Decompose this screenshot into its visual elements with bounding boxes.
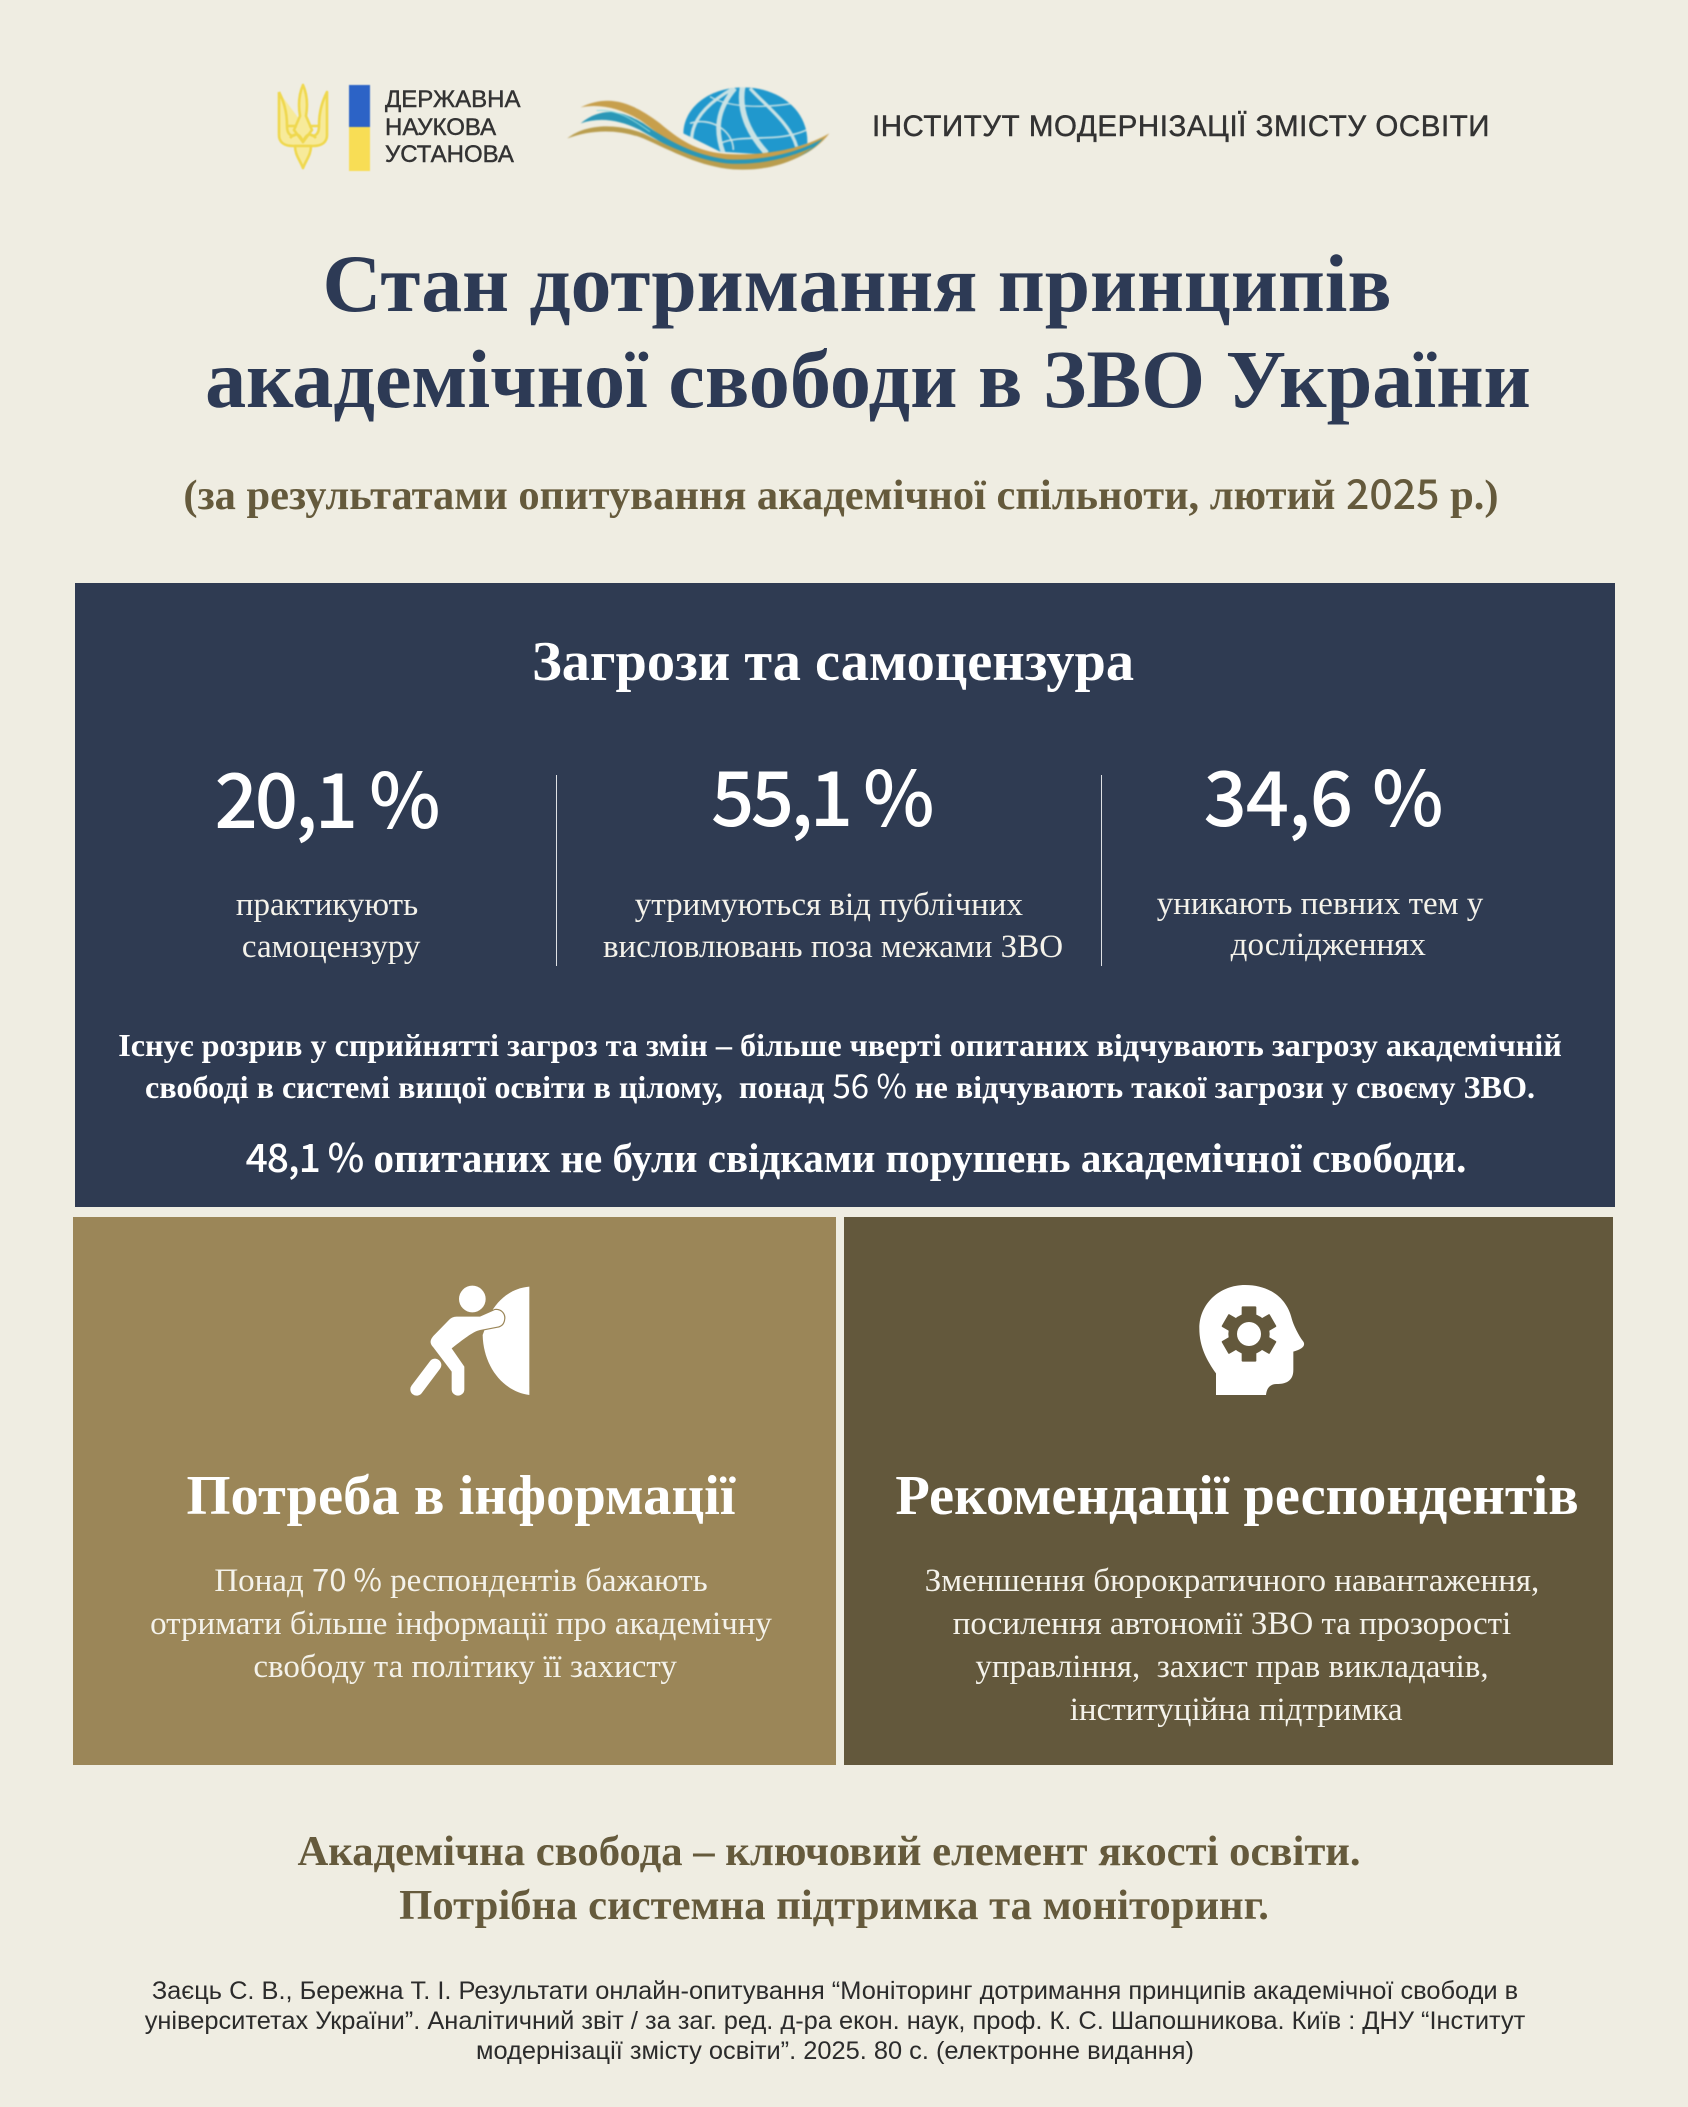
panel text	[925, 1563, 1539, 1728]
stat label	[603, 887, 1063, 964]
title line 1: Стан дотримання принципів	[323, 238, 1391, 329]
divider	[1101, 775, 1102, 966]
panel text: посилення автономії ЗВО та прозорості	[953, 1606, 1511, 1642]
stat label: практикують	[236, 887, 418, 923]
stat label: висловлювань поза межами ЗВО	[603, 928, 1063, 964]
stat 2	[603, 738, 1063, 964]
stat label	[1157, 886, 1484, 963]
conclusion line 2: Потрібна системна підтримка та моніторинг.	[399, 1882, 1269, 1929]
subtitle: (за результатами опитування академічної спільноти, лютий 2025 р.)	[183, 461, 1499, 521]
paragraph: perception gap	[118, 1027, 1562, 1108]
text: logo name: УСТАНОВА	[385, 141, 514, 168]
stat label: самоцензуру	[242, 928, 420, 964]
conclusion line 1: Академічна свобода – ключовий елемент якості освіти.	[297, 1828, 1361, 1875]
paragraph: perception gap: Існує розрив у сприйнятті загроз та змін – більше чверті опитаних відчувають загрозу академічній	[118, 1027, 1562, 1063]
title line 2: академічної свободи в ЗВО України	[205, 334, 1531, 425]
source citation: університетах України”. Аналітичний звіт / за заг. ред. д-ра екон. наук, проф. К. С. Шапошникова. Київ : ДНУ “Інститут	[145, 2007, 1525, 2035]
icon: Ukrainian trident	[277, 83, 329, 170]
panel heading: Рекомендації респондентів	[895, 1465, 1579, 1527]
icon: blue and yellow bar	[348, 84, 371, 172]
key finding: 48,1 % опитаних не були свідками порушень академічної свободи.	[246, 1128, 1466, 1184]
panel text: управління, захист прав викладачів,	[975, 1649, 1489, 1685]
logo: state scientific institution	[277, 83, 521, 172]
paragraph: perception gap: свободі в системі вищої освіти в цілому, понад 56 % не відчувають такої загрози у своєму ЗВО.	[145, 1060, 1535, 1108]
text: logo name: НАУКОВА	[385, 114, 496, 140]
divider	[556, 775, 557, 966]
source citation: Заєць С. В., Бережна Т. І. Результати онлайн-опитування “Моніторинг дотримання принципів академічної свободи в	[152, 1977, 1518, 2005]
text: logo name	[384, 86, 521, 168]
panel heading: Загрози та самоцензура	[532, 631, 1134, 693]
icon: person pushing a half circle	[410, 1286, 530, 1396]
panel text: отримати більше інформації про академічну	[150, 1606, 772, 1642]
panel: respondents' recommendations	[844, 1217, 1613, 1765]
source citation	[144, 1977, 1525, 2065]
stat label: дослідженнях	[1231, 927, 1426, 963]
logo: institute name: ІНСТИТУТ МОДЕРНІЗАЦІЇ ЗМІСТУ ОСВІТИ	[872, 110, 1490, 143]
stat label: уникають певних тем у	[1157, 886, 1483, 922]
icon: head with gear	[1199, 1285, 1304, 1395]
stat label	[236, 887, 420, 964]
conclusion	[297, 1828, 1361, 1929]
panel: threats and self-censorship	[75, 583, 1615, 1207]
text: logo name: ДЕРЖАВНА	[385, 86, 521, 113]
stat value: 34,6 %	[1203, 738, 1443, 848]
stat 3	[1157, 738, 1484, 963]
panel heading: Потреба в інформації	[186, 1465, 736, 1527]
stat label: утримуються від публічних	[635, 887, 1023, 923]
panel text: свободу та політику її захисту	[253, 1649, 677, 1685]
panel text: інституційна підтримка	[1070, 1692, 1402, 1728]
panel text: Зменшення бюрократичного навантаження,	[925, 1563, 1539, 1599]
title	[205, 238, 1531, 425]
source citation: модернізації змісту освіти”. 2025. 80 с. (електронне видання)	[476, 2037, 1194, 2065]
panel: need for information	[73, 1217, 836, 1765]
stat 1	[214, 740, 438, 964]
logo: wave and globe	[568, 86, 830, 171]
panel text	[150, 1555, 772, 1685]
stat value: 20,1 %	[214, 740, 438, 850]
panel text: Понад 70 % респондентів бажають	[214, 1555, 708, 1600]
stat value: 55,1 %	[711, 738, 931, 848]
